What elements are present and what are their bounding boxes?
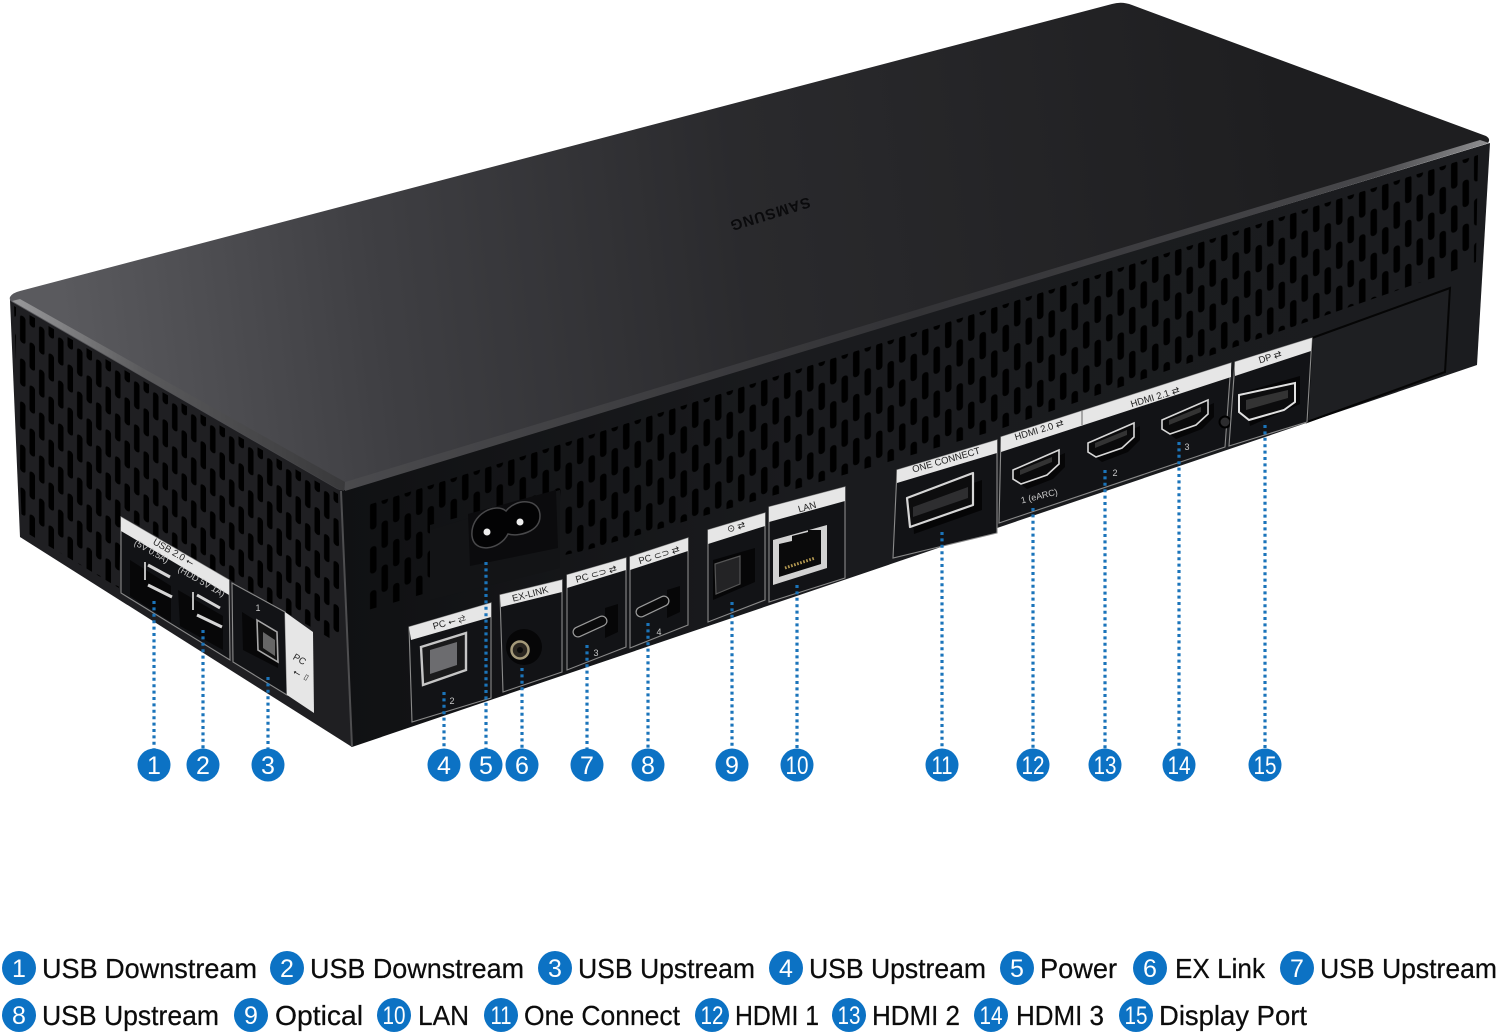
- panel: HDMI ports: HDMI 2.1 ⇄: [1129, 385, 1181, 410]
- legend: row 2: HDMI 1: [735, 1000, 819, 1031]
- legend: row 1: USB Upstream: [578, 953, 755, 984]
- panel: USB 2.0 downstream ports: USB 2.0 ⭠: [151, 537, 196, 569]
- panel: One Connect port: ONE CONNECT: [911, 446, 982, 476]
- legend: row 2: 15: [1124, 1002, 1148, 1030]
- panel: optical port: [708, 513, 765, 622]
- numbered callout markers: 2: [196, 752, 210, 780]
- panel: LAN port: LAN: [797, 500, 818, 515]
- legend: row 2: 8: [12, 1002, 26, 1030]
- legend: row 2: 12: [700, 1002, 724, 1030]
- panel: Display Port: DP ⇄: [1257, 349, 1283, 366]
- panel: USB upstream port 2: [409, 603, 491, 722]
- panel: USB upstream port 1: PC: [291, 652, 308, 668]
- legend: row 1: 7: [1290, 955, 1304, 983]
- panel: HDMI ports: HDMI 2.0 ⇄: [1013, 418, 1065, 443]
- legend: row 2: 9: [244, 1002, 258, 1030]
- power socket: [430, 490, 560, 600]
- legend: row 1: 3: [548, 955, 562, 983]
- legend: row 2: One Connect: [524, 1000, 680, 1031]
- panel: USB-C port 3: [567, 558, 626, 670]
- legend: row 1: EX Link: [1175, 953, 1266, 984]
- numbered callout markers: 7: [580, 752, 594, 780]
- panel: USB 2.0 downstream ports: [121, 517, 230, 660]
- device: left side face: [10, 300, 352, 747]
- legend: row 1: 5: [1010, 955, 1024, 983]
- numbered callout markers: 8: [641, 752, 655, 780]
- legend: row 2: HDMI 3: [1016, 1000, 1104, 1031]
- numbered callout markers: 1: [147, 752, 161, 780]
- legend: row 1: 1: [12, 955, 26, 983]
- panel: USB upstream port 1: [232, 583, 314, 713]
- legend: row 2: Optical: [275, 1000, 363, 1031]
- panel: USB-C port 4: [630, 538, 688, 648]
- numbered callout markers: 14: [1168, 752, 1191, 780]
- panel: Display Port: [1229, 338, 1312, 446]
- panel: USB upstream port 1: 1: [255, 603, 261, 613]
- panel: USB 2.0 downstream ports: (5V 0.5A): [133, 538, 170, 565]
- numbered callout markers: 15: [1254, 752, 1276, 780]
- numbered callout markers: 12: [1022, 752, 1044, 780]
- panel: EX-LINK jack: [500, 580, 562, 692]
- numbered callout markers: 3: [261, 752, 275, 780]
- legend: row 2: 13: [838, 1002, 860, 1030]
- panel: HDMI ports: 2: [1112, 468, 1118, 478]
- panel: One Connect port: [893, 440, 997, 558]
- legend: row 2: 11: [490, 1002, 512, 1030]
- panel: HDMI ports: [999, 363, 1231, 523]
- legend: row 1: [2, 951, 1497, 985]
- legend: row 1: 2: [280, 955, 294, 983]
- panel: USB-C port 3: 3: [593, 648, 599, 658]
- panel: USB-C port 4: 4: [656, 627, 662, 637]
- legend: row 1: Power: [1040, 953, 1117, 984]
- logo: SAMSUNG on top face: SAMSUNG: [727, 193, 812, 234]
- device: front face: [341, 143, 1490, 747]
- legend: row 2: USB Upstream: [42, 1000, 219, 1031]
- panel: HDMI ports: 3: [1184, 442, 1190, 452]
- legend: row 1: 4: [779, 955, 793, 983]
- legend: row 2: Display Port: [1159, 1000, 1307, 1031]
- numbered callout markers: 13: [1094, 752, 1116, 780]
- numbered callout markers: 9: [725, 752, 739, 780]
- legend: row 2: 14: [980, 1002, 1003, 1030]
- legend: row 1: USB Upstream: [809, 953, 986, 984]
- numbered callout markers: [138, 748, 1282, 782]
- panel: HDMI ports: 1 (eARC): [1020, 487, 1059, 505]
- numbered callout markers: 10: [786, 752, 808, 780]
- panel: optical port: ⊙ ⇄: [726, 520, 747, 535]
- panel: LAN port: [769, 487, 845, 602]
- panel: USB upstream port 1: ⭠ ▯: [291, 667, 312, 685]
- panel: EX-LINK jack: EX-LINK: [511, 584, 550, 605]
- panel: USB upstream port 2: PC ⭠ ⇄: [432, 613, 467, 633]
- numbered callout markers: 6: [515, 752, 529, 780]
- panel: USB-C port 3: PC ⊂⊃ ⇄: [574, 563, 618, 586]
- device: top face with brushed metal: [10, 3, 1489, 747]
- legend: row 1: USB Downstream: [310, 953, 524, 984]
- legend: row 2: [2, 998, 1307, 1032]
- legend: row 2: LAN: [418, 1000, 469, 1031]
- panel: USB 2.0 downstream ports: (HDD 5V 1A): [176, 564, 227, 599]
- panel: USB-C port 4: PC ⊂⊃ ⇄: [637, 544, 681, 567]
- legend: row 1: USB Downstream: [42, 953, 257, 984]
- legend: row 2: 10: [382, 1002, 406, 1030]
- numbered callout markers: 4: [437, 752, 451, 780]
- numbered callout markers: 11: [932, 752, 952, 780]
- dotted leader lines: [154, 425, 1265, 749]
- legend: row 2: HDMI 2: [872, 1000, 960, 1031]
- panel: USB upstream port 2: 2: [449, 696, 455, 706]
- legend: row 1: 6: [1143, 955, 1157, 983]
- numbered callout markers: 5: [479, 752, 493, 780]
